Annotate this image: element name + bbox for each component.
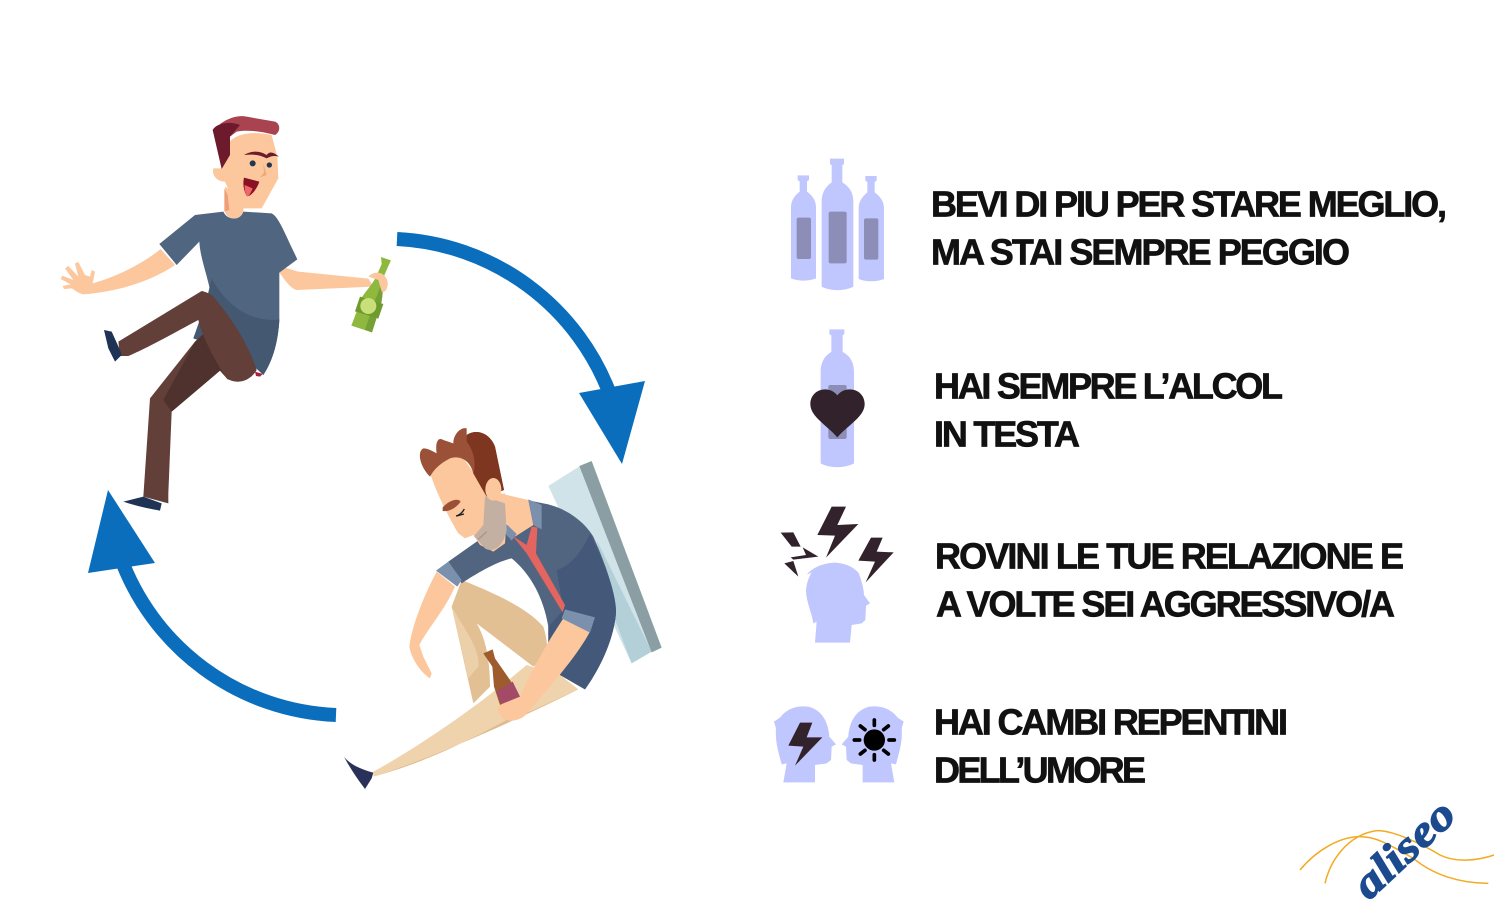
arrow: cycle arrow bottom left bbox=[88, 490, 336, 715]
text block: relationships bbox=[935, 536, 1404, 624]
text block: relationships: A VOLTE SEI AGGRESSIVO/A bbox=[936, 584, 1395, 624]
text block: drink more bbox=[931, 184, 1447, 272]
icon: head with lightning bolts bbox=[781, 507, 894, 643]
text block: mood swings: DELL’UMORE bbox=[934, 750, 1146, 790]
text block: relationships: ROVINI LE TUE RELAZIONE E bbox=[935, 536, 1404, 576]
icon: two heads, lightning and sun bbox=[774, 706, 904, 782]
text block: alcohol on your mind bbox=[934, 366, 1283, 454]
text block: drink more: BEVI DI PIU PER STARE MEGLIO, bbox=[931, 184, 1447, 224]
text block: drink more: MA STAI SEMPRE PEGGIO bbox=[931, 232, 1350, 272]
text block: alcohol on your mind: HAI SEMPRE L’ALCOL bbox=[934, 366, 1283, 406]
text block: alcohol on your mind: IN TESTA bbox=[934, 414, 1080, 454]
text block: mood swings bbox=[934, 702, 1288, 790]
arrow: cycle arrow top right bbox=[397, 239, 645, 464]
illustration: man slumped against the wall with brown bottle bbox=[344, 428, 662, 789]
logo: aliseo: aliseo bbox=[1342, 789, 1465, 908]
illustration: man stumbling with green bottle bbox=[61, 116, 391, 511]
icon: bottle with heart bbox=[810, 329, 865, 467]
icon: three bottles bbox=[791, 159, 884, 290]
text block: mood swings: HAI CAMBI REPENTINI bbox=[934, 702, 1288, 742]
logo: aliseo bbox=[1300, 789, 1494, 908]
